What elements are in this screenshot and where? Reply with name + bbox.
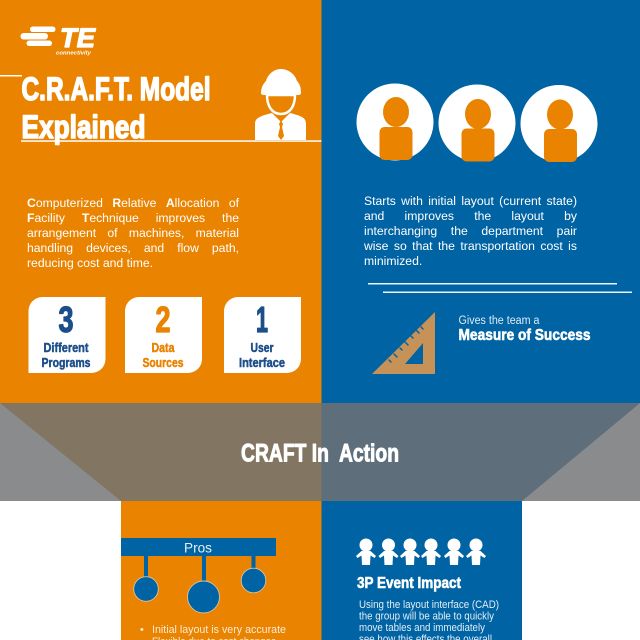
logo: TE connectivity: TE	[60, 23, 96, 53]
panel: blue lower column	[322, 501, 522, 640]
icon: worker with hard hat	[255, 69, 306, 140]
pros list: Initial layout is very accurate	[152, 624, 286, 636]
card: 2 data sources: Sources	[142, 355, 184, 370]
text: CRAFT definition: Computerized Relative Allocation of	[27, 196, 239, 210]
callout: measure of success: Gives the team a	[458, 315, 540, 327]
card: 1 user interface: Interface	[239, 355, 285, 370]
card: 3 different programs: Different	[44, 340, 89, 355]
icon: set square ruler	[372, 312, 435, 374]
panel: blue top right background	[322, 0, 640, 403]
logo: TE connectivity	[20, 23, 96, 56]
card: 1 user interface: 1	[256, 299, 268, 340]
pros diagram: Pros	[184, 540, 212, 556]
card: 1 user interface: User	[250, 340, 274, 355]
heading: CRAFT In Action: CRAFT In Action	[241, 440, 399, 468]
panel: orange lower column	[121, 501, 322, 640]
title: C.R.A.F.T. Model	[22, 71, 210, 107]
title	[22, 71, 210, 145]
card: 2 data sources: 2	[156, 299, 170, 340]
panel: orange top left background	[0, 0, 322, 403]
card: 2 data sources: Data	[152, 340, 175, 355]
title: Explained	[22, 109, 146, 145]
card: 3 different programs	[28, 297, 105, 373]
text: layout improvement description: minimized.	[364, 254, 422, 268]
card: 1 user interface	[224, 297, 301, 373]
text: CRAFT definition: arrangement of machines, material	[27, 226, 239, 240]
text: CRAFT definition: handling devices, and flow path,	[27, 241, 239, 255]
text: 3P event impact description: Using the layout interface (CAD)	[359, 599, 499, 611]
card: 3 different programs: 3	[58, 299, 74, 340]
pros diagram	[121, 538, 276, 613]
text: layout improvement description	[364, 194, 577, 268]
double rule lines	[368, 283, 632, 293]
text: 3P event impact description	[359, 599, 499, 640]
text: 3P event impact description: the group will be able to quickly	[359, 610, 495, 622]
title rule bottom	[21, 140, 322, 142]
callout: measure of success	[458, 315, 591, 344]
callout: measure of success: Measure of Success	[458, 327, 591, 344]
heading: 3P Event Impact: 3P Event Impact	[357, 575, 462, 592]
card: 3 different programs: Programs	[42, 355, 90, 370]
text: 3P event impact description: move tables and immediately	[359, 622, 486, 634]
text: layout improvement description: interchanging the department pair	[364, 224, 577, 238]
icon group: three people in circles	[356, 84, 598, 162]
text: layout improvement description: and improves the layout by	[364, 209, 577, 223]
band: left trapezoid	[0, 403, 322, 501]
pros list: •	[140, 624, 144, 636]
band: right trapezoid	[322, 403, 640, 501]
text: layout improvement description: wise so that the transportation cost is	[364, 239, 577, 253]
icon: row of six people	[356, 538, 486, 565]
card: 2 data sources	[125, 297, 202, 373]
text: CRAFT definition	[27, 196, 240, 270]
text: CRAFT definition: reducing cost and time.	[27, 256, 153, 270]
title rule left	[0, 75, 22, 76]
logo: TE connectivity: connectivity	[56, 50, 92, 56]
text: layout improvement description: Starts with initial layout (current state)	[364, 194, 577, 208]
band: gray background	[0, 403, 640, 501]
pros list	[140, 624, 286, 640]
text: CRAFT definition: Facility Technique improves the	[27, 211, 239, 225]
